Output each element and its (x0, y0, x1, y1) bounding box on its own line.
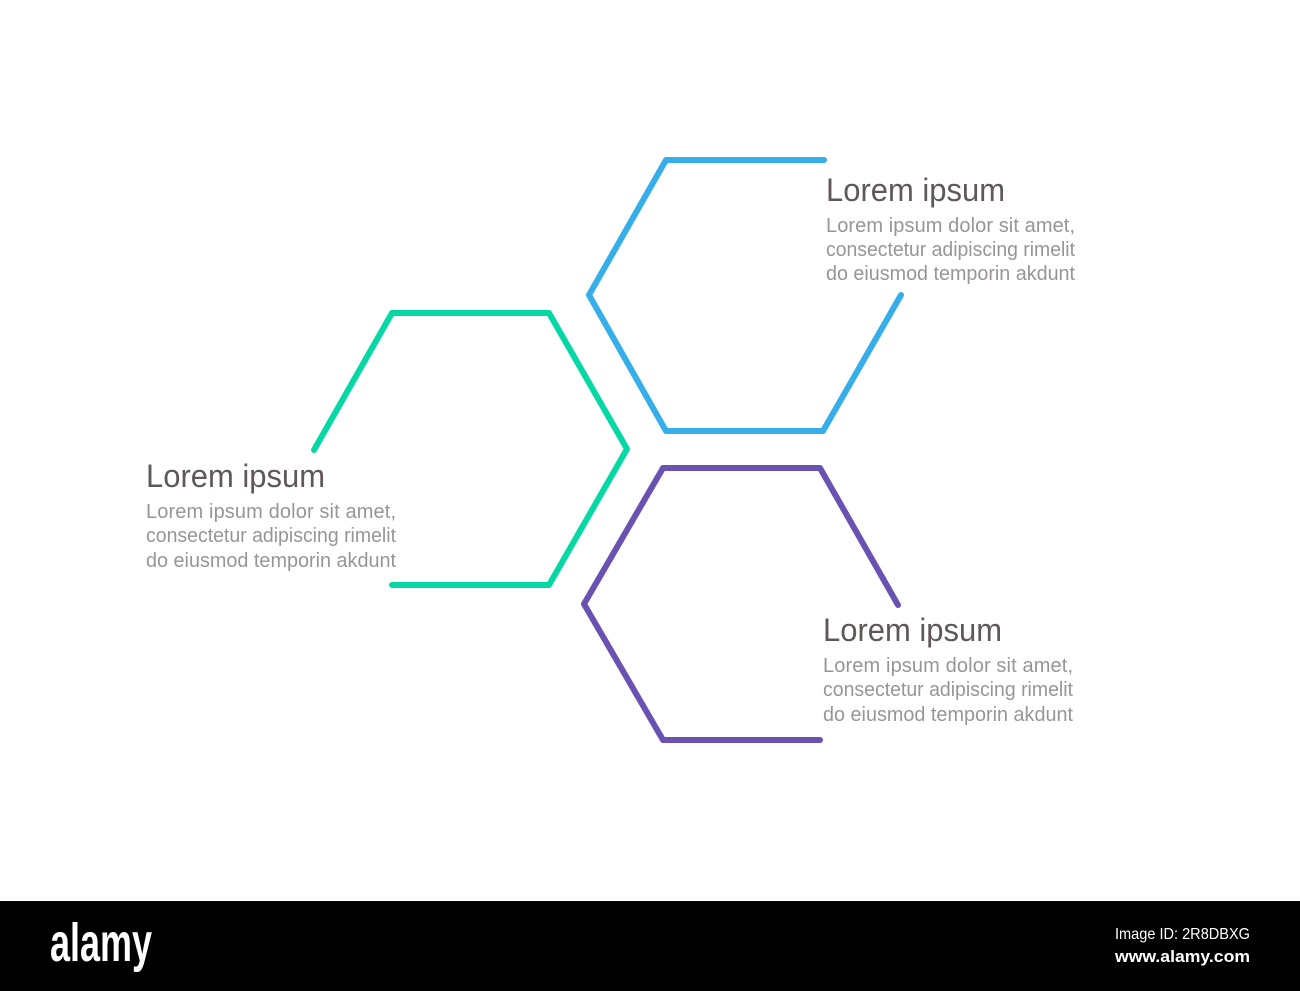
body text: left: consectetur adipiscing rimelit (146, 525, 396, 547)
heading: top right: Lorem ipsum (826, 172, 1005, 208)
text block: bottom right (823, 612, 1073, 726)
icon: green open hexagon (314, 313, 627, 585)
icon: blue open hexagon (589, 160, 901, 431)
text block: left (146, 458, 396, 572)
logo: alamy: alamy (50, 913, 152, 973)
body text: left: do eiusmod temporin akdunt (146, 550, 396, 572)
body text: bottom right: consectetur adipiscing rimelit (823, 679, 1073, 701)
body text: bottom right (823, 655, 1073, 726)
body text: top right: consectetur adipiscing rimelit (826, 239, 1075, 261)
heading: bottom right: Lorem ipsum (823, 612, 1002, 648)
icon: purple open hexagon (584, 468, 898, 740)
body text: left (146, 501, 396, 572)
image ID: Image ID: 2R8DBXG (1115, 926, 1250, 943)
body text: bottom right: Lorem ipsum dolor sit amet, (823, 655, 1073, 677)
text block: top right (826, 172, 1075, 285)
body text: left: Lorem ipsum dolor sit amet, (146, 501, 396, 523)
website URL: www.alamy.com (1114, 947, 1250, 966)
body text: bottom right: do eiusmod temporin akdunt (823, 704, 1073, 726)
body text: top right: do eiusmod temporin akdunt (826, 263, 1075, 285)
heading: left: Lorem ipsum (146, 458, 325, 494)
footer bar (0, 901, 1300, 991)
body text: top right: Lorem ipsum dolor sit amet, (826, 215, 1075, 237)
body text: top right (826, 215, 1075, 285)
